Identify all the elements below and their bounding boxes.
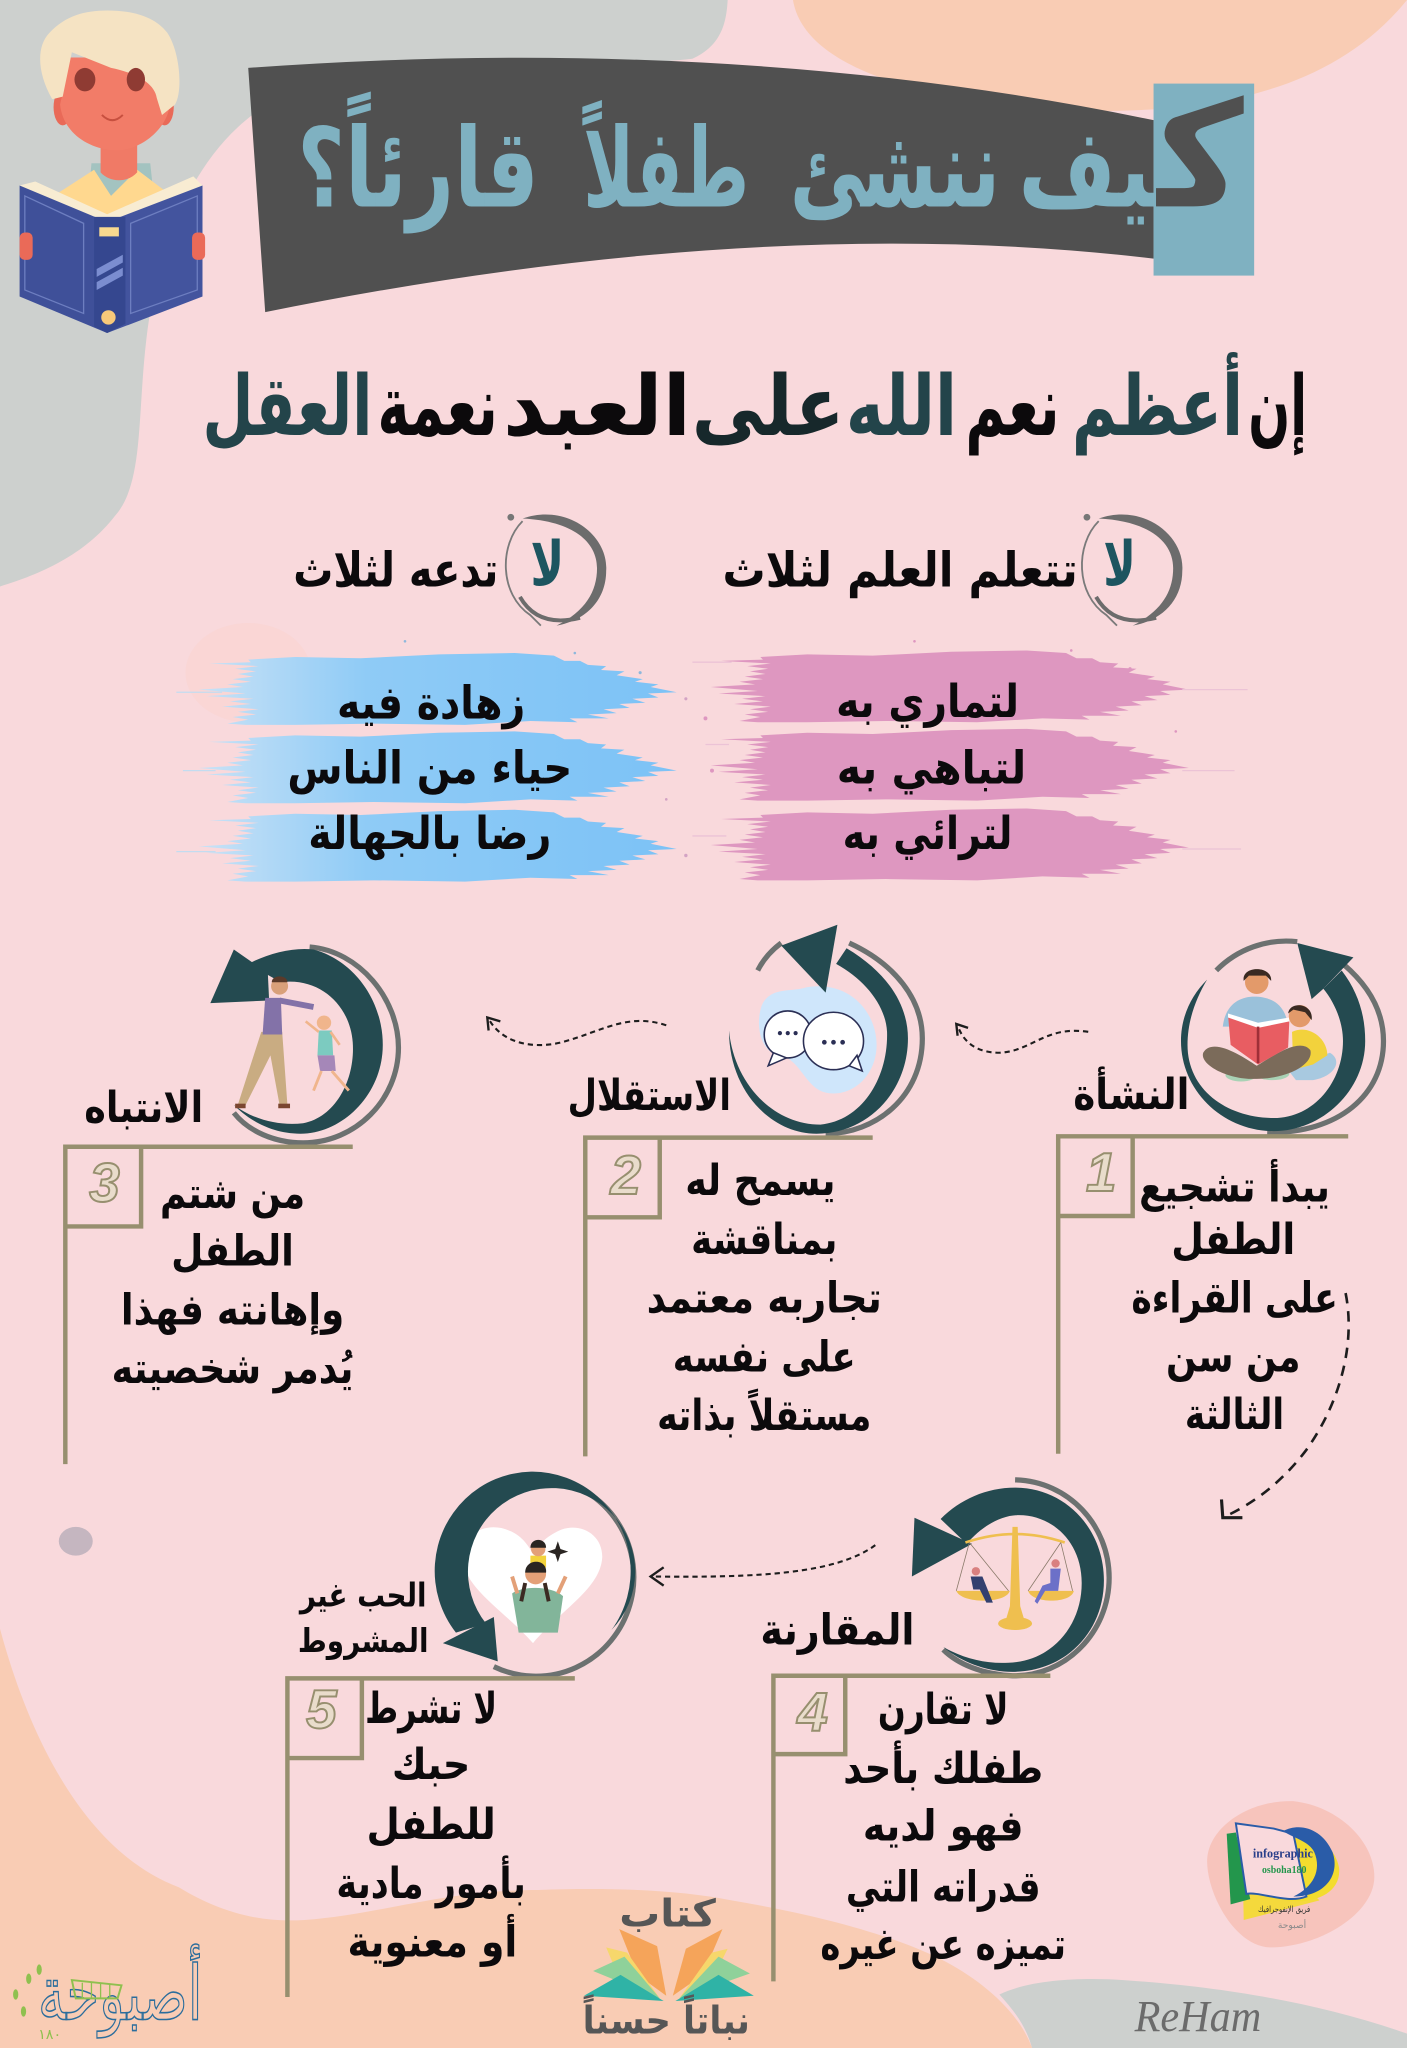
logo: book title: كتاب	[619, 1892, 717, 1936]
step title: المقارنة	[760, 1605, 914, 1655]
step text: الطفل	[1171, 1215, 1295, 1265]
arrow: step 2 to 3	[487, 1017, 666, 1045]
logo: Osboha 180	[13, 1943, 202, 2043]
icon: brush ring: لا	[1103, 529, 1136, 600]
logo: infographic team: infographic	[1253, 1846, 1313, 1860]
heading: do not learn for three	[722, 514, 1182, 626]
step text: فهو لديه	[863, 1801, 1024, 1851]
list text	[836, 675, 1026, 860]
list text: لتماري به	[836, 675, 1019, 728]
frame and number	[65, 1147, 353, 1464]
list text: لتباهي به	[837, 742, 1026, 795]
icon: balance scale	[956, 1527, 1074, 1630]
grey dot	[59, 1527, 93, 1556]
step title: النشأة	[1073, 1066, 1189, 1120]
title text	[297, 70, 1245, 241]
step title: الاستقلال	[568, 1071, 731, 1121]
step 3: attention	[65, 947, 398, 1464]
frame and number	[1058, 1136, 1348, 1454]
heading: do not leave for three	[293, 514, 606, 626]
step 1: upbringing	[1058, 941, 1383, 1454]
heading text: تتعلم العلم لثلاث	[722, 542, 1078, 598]
list text: رضا بالجهالة	[308, 807, 551, 860]
panel: pink brush list	[692, 640, 1248, 880]
icon: speech bubbles	[759, 986, 877, 1093]
logo: infographic team	[1207, 1801, 1374, 1947]
arrow: step 1 to 2	[956, 1024, 1088, 1053]
step text: من سن	[1166, 1332, 1301, 1382]
list text	[287, 676, 572, 860]
step text	[336, 1684, 526, 1968]
signature: ReHam	[1134, 1991, 1261, 2041]
logo: infographic team: فريق الإنفوجرافيك	[1258, 1905, 1310, 1915]
step 5: unconditional love	[287, 1472, 635, 1997]
step text: قدراته التي	[846, 1863, 1041, 1913]
step 4: comparison	[760, 1480, 1109, 1981]
step title: المشروط	[298, 1622, 429, 1661]
step text: يُدمر شخصيته	[112, 1344, 353, 1394]
frame and number: 1	[1086, 1141, 1117, 1203]
step text	[647, 1156, 882, 1441]
arrow: step 4 to 5	[651, 1545, 875, 1586]
circular arrow	[729, 925, 922, 1134]
frame and number: 2	[610, 1144, 641, 1206]
step text: لا تشرط	[365, 1684, 497, 1734]
step text: يسمح له	[685, 1156, 835, 1206]
icon: father scolding child	[235, 976, 349, 1108]
background shape: grey top-left	[0, 0, 728, 586]
circular arrow	[1181, 941, 1383, 1132]
logo: book title: نباتاً حسناً	[583, 1993, 750, 2043]
step text: لا تقارن	[878, 1685, 1009, 1735]
icon: brush ring	[506, 514, 606, 626]
step text: تميزه عن غيره	[820, 1920, 1066, 1970]
logo: Osboha 180: أصبوحة	[38, 1943, 202, 2038]
step text: طفلك بأحد	[843, 1740, 1043, 1794]
step title: الانتباه	[84, 1083, 203, 1133]
title text: قارئاً؟	[297, 91, 539, 233]
arrow: step 1 to 4	[1221, 1293, 1349, 1518]
background shape: peach bottom-left	[0, 1629, 1032, 2048]
subtitle: أعظم	[1072, 352, 1243, 456]
step text	[1131, 1159, 1338, 1440]
subtitle: الله	[846, 357, 957, 455]
logo: Osboha 180: ١٨٠	[38, 2027, 61, 2043]
logo: infographic team: osboha180	[1262, 1865, 1306, 1876]
step text: من شتم	[160, 1169, 305, 1219]
icon: father and son reading	[1203, 969, 1336, 1081]
frame and number: 3	[89, 1152, 120, 1214]
step text: الطفل	[171, 1227, 294, 1277]
subtitle: العبد	[503, 357, 691, 455]
heading text: تدعه لثلاث	[293, 542, 498, 598]
step title: الحب غير	[298, 1577, 427, 1615]
title text: ك‍	[1155, 70, 1245, 241]
logo: book title	[583, 1892, 754, 2043]
step 2: independence	[568, 925, 922, 1456]
step text: تجاربه معتمد	[647, 1274, 882, 1324]
step text	[112, 1169, 353, 1394]
subtitle	[202, 352, 1307, 456]
step text: على القراءة	[1131, 1274, 1338, 1324]
subtitle: على	[692, 357, 845, 455]
title banner	[248, 58, 1254, 312]
step text: بأمور مادية	[336, 1855, 526, 1909]
title text: طفلاً	[582, 99, 749, 232]
title text: ننشئ	[790, 104, 1000, 232]
step text: حبك	[392, 1740, 470, 1790]
step title	[298, 1577, 429, 1661]
icon: heart with father and child	[462, 1527, 602, 1643]
icon: brush ring: لا	[530, 529, 564, 600]
step text: مستقلاً بذاته	[657, 1388, 871, 1441]
logo: infographic team: أصبوحة	[1278, 1919, 1307, 1931]
frame and number	[287, 1678, 575, 1997]
panel: blue brush list	[176, 623, 688, 882]
step text: للطفل	[366, 1800, 496, 1850]
subtitle: نعمة	[378, 357, 498, 455]
step text: أو معنوية	[348, 1914, 517, 1968]
subtitle: إن	[1248, 357, 1307, 456]
icon: brush ring	[1082, 514, 1182, 626]
step text: يبدأ تشجيع	[1139, 1159, 1330, 1213]
banner square	[1154, 84, 1254, 276]
frame and number	[773, 1676, 1050, 1981]
circular arrow	[435, 1472, 635, 1676]
subtitle: العقل	[202, 357, 372, 455]
banner shape	[248, 58, 1154, 312]
circular arrow	[210, 947, 398, 1143]
step text	[820, 1685, 1066, 1970]
circular arrow	[912, 1480, 1109, 1676]
frame and number	[585, 1138, 873, 1456]
step text: وإهانته فهذا	[121, 1285, 344, 1335]
step text: بمناقشة	[691, 1215, 837, 1265]
list text: زهادة فيه	[337, 676, 525, 729]
illustration: boy reading a book	[20, 10, 205, 333]
title text: ‍يف	[1018, 104, 1154, 232]
frame and number: 5	[306, 1678, 338, 1740]
list text: حياء من الناس	[287, 742, 572, 795]
step text: على نفسه	[673, 1332, 856, 1382]
background shape: grey bottom-right	[999, 1979, 1407, 2048]
background shape: peach top-right	[793, 0, 1407, 111]
subtitle: نعم	[965, 357, 1059, 456]
list text: لترائي به	[843, 807, 1012, 860]
step text: الثالثة	[1185, 1390, 1284, 1440]
frame and number: 4	[796, 1681, 828, 1743]
